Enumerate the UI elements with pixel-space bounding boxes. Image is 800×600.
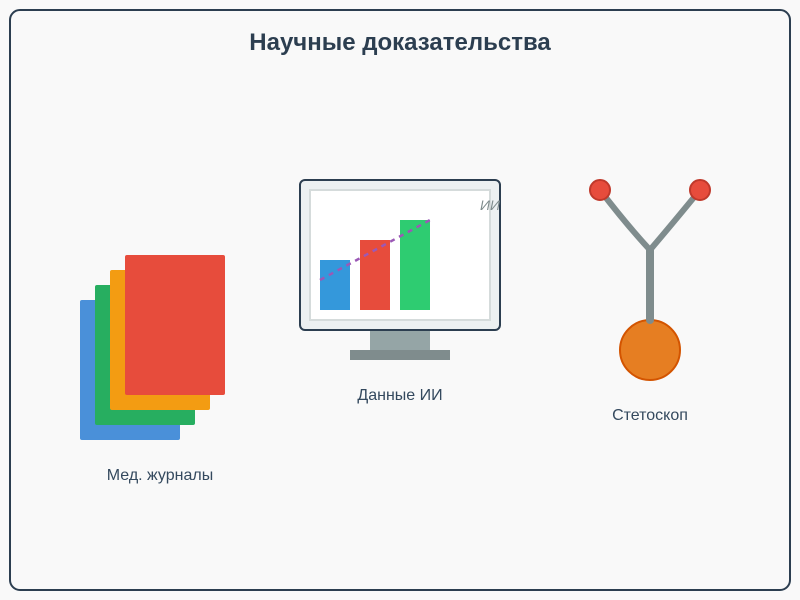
AI label: ИИ (480, 197, 500, 213)
icon: stack of medical journals (80, 255, 225, 440)
bar: blue (320, 260, 350, 310)
bar: green (400, 220, 430, 310)
bar: red (360, 240, 390, 310)
monitor body (300, 180, 500, 330)
journal: red (125, 255, 225, 395)
tube stem (646, 250, 654, 320)
label: stethoscope: Стетоскоп (612, 407, 688, 424)
bar chart (320, 220, 430, 310)
journal: blue (80, 300, 180, 440)
tube left branch (600, 190, 650, 250)
title: Научные доказательства (249, 29, 551, 56)
trend line (320, 220, 430, 280)
left earpiece (590, 180, 610, 200)
label: AI data: Данные ИИ (357, 387, 443, 404)
monitor stand base (350, 350, 450, 360)
monitor screen (310, 190, 490, 320)
icon: stethoscope (590, 180, 710, 380)
journal: green (95, 285, 195, 425)
tube right branch (650, 190, 700, 250)
journal: orange (110, 270, 210, 410)
monitor stand neck (370, 330, 430, 350)
icon: computer monitor with AI data (300, 180, 500, 360)
right earpiece (690, 180, 710, 200)
label: journals: Мед. журналы (107, 467, 213, 484)
chest piece (620, 320, 680, 380)
